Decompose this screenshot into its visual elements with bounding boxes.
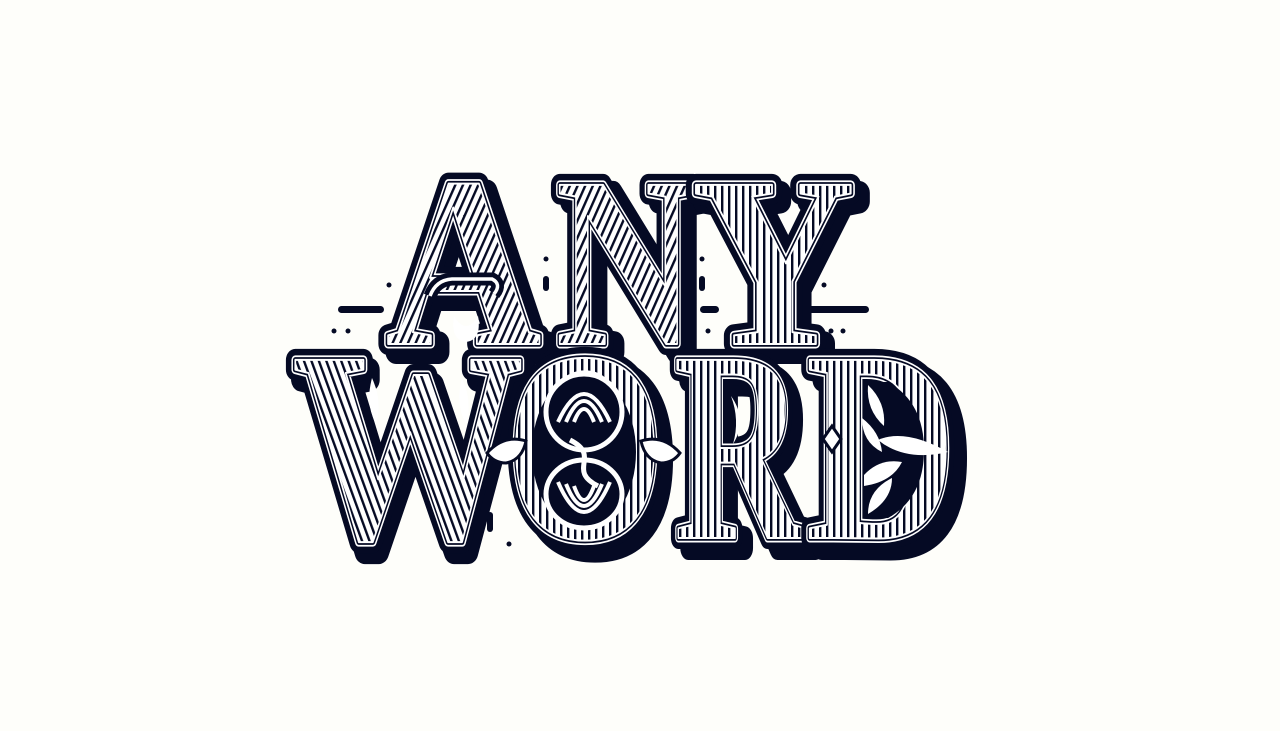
ornament: O scrollwork <box>487 374 680 530</box>
decorative dashes and dots <box>332 256 869 546</box>
word: WORD: D <box>806 296 956 597</box>
ornament: R crescent <box>731 396 740 444</box>
word: ANY: N <box>556 127 696 397</box>
word: WORD: D <box>806 296 956 597</box>
word: WORD <box>292 296 968 607</box>
word: WORD: O <box>506 296 664 597</box>
word: WORD: D <box>806 296 956 597</box>
word: ANY: N <box>556 127 696 397</box>
word: ANY: Y <box>692 127 855 397</box>
word: ANY: N <box>556 127 696 397</box>
word: WORD: O <box>506 296 664 597</box>
word: ANY: A <box>386 127 541 397</box>
word: WORD: R <box>674 296 806 597</box>
word: WORD: D <box>806 296 956 597</box>
word: WORD: W <box>292 296 524 597</box>
word: WORD: W <box>292 296 524 597</box>
word: WORD: R <box>674 296 806 597</box>
word: WORD: R <box>674 296 806 597</box>
word: WORD: W <box>292 296 524 597</box>
word: WORD: W <box>298 306 530 607</box>
word: ANY: Y <box>692 127 855 397</box>
word: ANY: A <box>394 135 549 405</box>
word: WORD: R <box>674 296 806 597</box>
word: ANY: Y <box>692 127 855 397</box>
word: ANY: Y <box>692 127 855 397</box>
word: ANY: A <box>386 127 541 397</box>
word: WORD: R <box>684 306 816 607</box>
ornament: A crossbar knot and crescent <box>430 279 498 342</box>
word: ANY: Y <box>700 135 863 405</box>
word: WORD: O <box>516 306 674 607</box>
word: ANY: A <box>386 127 541 397</box>
word: ANY: A <box>386 127 541 397</box>
word: WORD: D <box>818 306 968 607</box>
word: WORD: O <box>506 296 664 597</box>
ornament: D foliage and diamond <box>823 382 948 518</box>
ornament: W teardrops <box>369 378 469 424</box>
word: ANY <box>386 127 863 405</box>
word: ANY: N <box>566 135 706 405</box>
word: WORD: W <box>292 296 524 597</box>
word: ANY: N <box>556 127 696 397</box>
word: WORD: O <box>506 296 664 597</box>
